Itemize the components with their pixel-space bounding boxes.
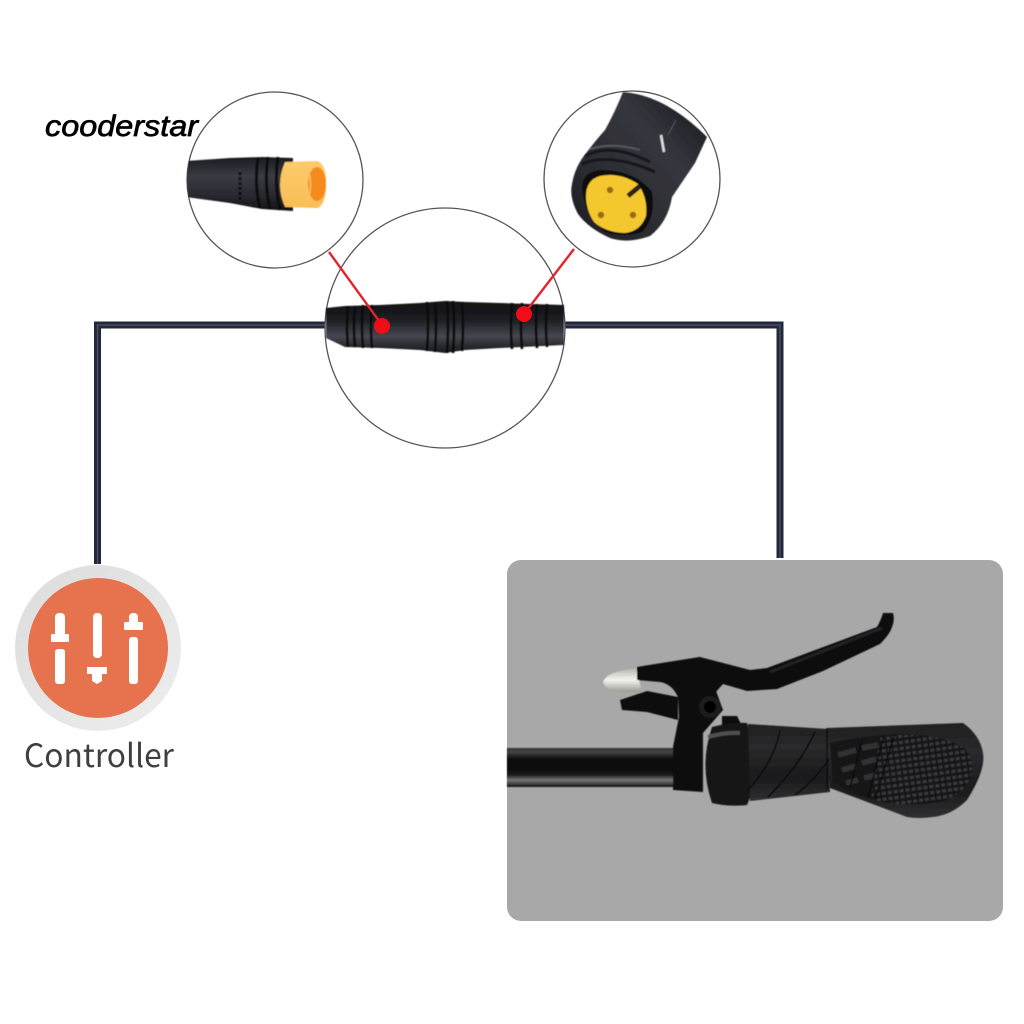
- lens: [603, 668, 642, 692]
- lever: [637, 613, 894, 693]
- photo panel: brake lever and grip: [507, 560, 1003, 921]
- pointer: right connector: [516, 249, 574, 322]
- pointer: left connector: [329, 252, 390, 334]
- wiring lines: [98, 325, 780, 564]
- zoom circle: joined connector: [325, 208, 565, 448]
- zoom circle: male connector: [186, 92, 363, 268]
- handlebar: [507, 748, 680, 787]
- secondary lever: [620, 691, 678, 720]
- icon: controller: [15, 565, 181, 731]
- label: controller: Controller: [24, 731, 175, 777]
- bolt: [699, 696, 721, 718]
- lever highlight: [770, 628, 882, 672]
- grip mid: [748, 724, 830, 801]
- grip end: [827, 723, 983, 818]
- clamp: [637, 657, 723, 792]
- zoom circle: female connector: [544, 91, 720, 267]
- watermark: cooderstar: [45, 110, 199, 143]
- grip texture: [830, 734, 972, 804]
- grip collar: [706, 723, 753, 806]
